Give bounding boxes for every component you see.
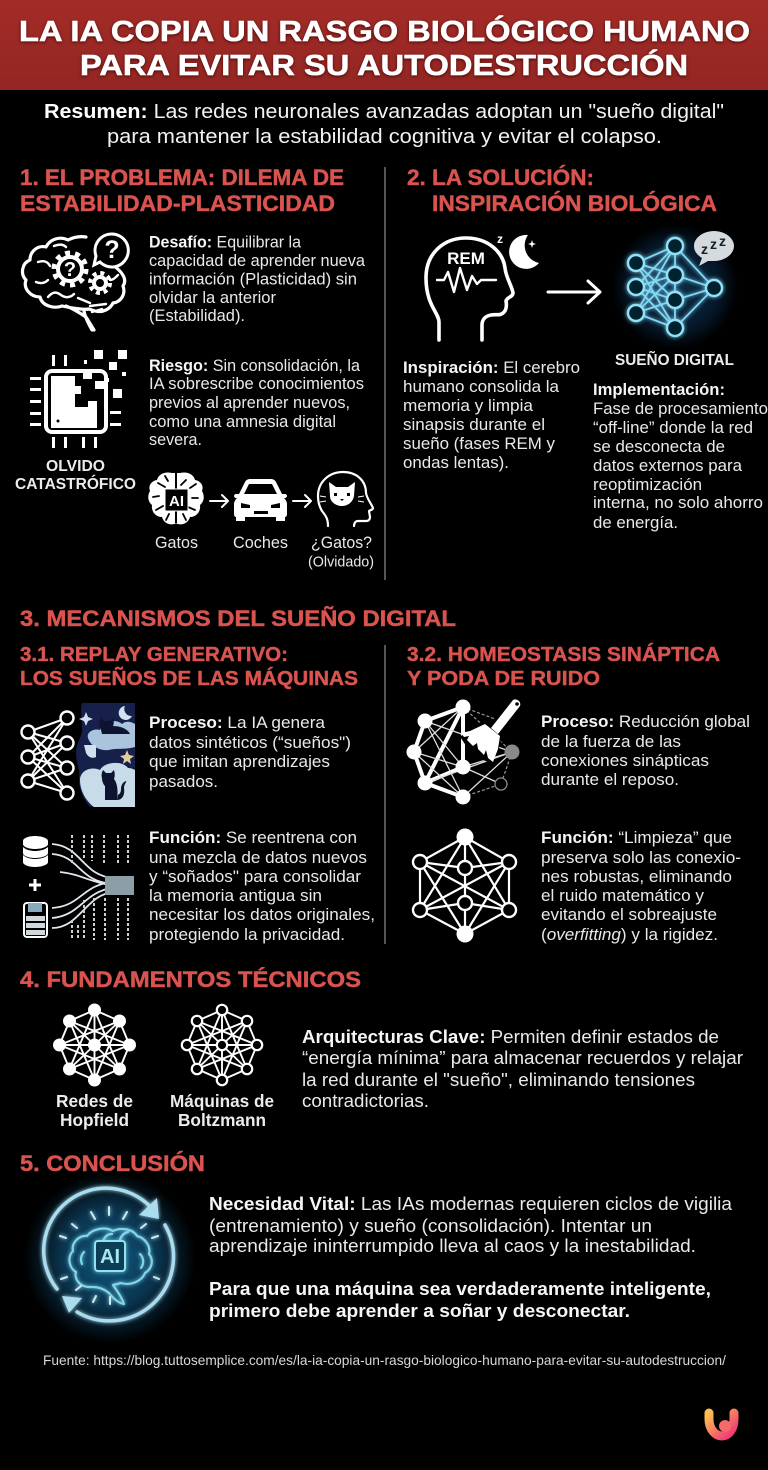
title banner [0, 0, 768, 90]
heading: section 5: 5. CONCLUSIÓN [20, 1151, 205, 1176]
text: funcion: Función: “Limpieza” que [541, 828, 732, 847]
icon: network with brush [406, 699, 520, 804]
icon: glowing neural network: z [710, 236, 717, 252]
text: inspiracion: Inspiración: El cerebro [403, 358, 580, 377]
icon: boltzmann machine [182, 1005, 262, 1085]
icon: chip dissolving [30, 350, 127, 448]
text: necesidad vital: (entrenamiento) y sueño (consolidación). Intentar un [209, 1215, 652, 1236]
text: proceso: durante el reposo. [541, 770, 679, 789]
text: funcion [149, 828, 375, 944]
text: funcion: y “soñados" para consolidar [149, 867, 361, 886]
text: implementacion: datos externos para [593, 456, 743, 475]
icon: human head REM: z [497, 232, 503, 246]
text: arquitecturas clave: la red durante el "sueño", eliminando tensiones [302, 1069, 695, 1090]
text: funcion: evitando el sobreajuste [541, 905, 717, 924]
title banner: LA IA COPIA UN RASGO BIOLÓGICO HUMANO [19, 14, 750, 48]
label: gatos olvidado: ¿Gatos? [311, 533, 372, 552]
text: implementacion: reoptimización [593, 475, 702, 494]
text: proceso: Proceso: La IA genera [149, 713, 326, 732]
icon: human head REM: REM [447, 249, 485, 268]
icon: hopfield network [53, 1004, 136, 1086]
heading: section 1: ESTABILIDAD-PLASTICIDAD [20, 191, 335, 216]
label: olvido catastrofico: CATASTRÓFICO [15, 474, 136, 493]
heading: section 1: 1. EL PROBLEMA: DILEMA DE [20, 165, 344, 190]
icon: brain with gears and question: ? [104, 236, 120, 264]
text: funcion: nes robustas, eliminando [541, 867, 732, 886]
icon: clean network [413, 828, 516, 942]
title banner: PARA EVITAR SU AUTODESTRUCCIÓN [80, 48, 688, 82]
label: olvido catastrofico [15, 458, 136, 493]
label: olvido catastrofico: OLVIDO [46, 458, 105, 475]
label: maquinas de boltzmann: Boltzmann [178, 1110, 266, 1130]
text: implementacion [593, 380, 768, 532]
text: necesidad vital [209, 1193, 733, 1256]
text: proceso: que imitan aprendizajes [149, 752, 330, 771]
label: coches: Coches [233, 533, 288, 552]
text: proceso: de la fuerza de las [541, 732, 681, 751]
icon: glowing neural network: z [719, 233, 726, 249]
icon: glowing neural network [612, 224, 738, 349]
text: riesgo: Riesgo: Sin consolidación, la [149, 356, 361, 375]
icon: AI brain [148, 472, 204, 524]
icon: AI brain: AI [169, 493, 184, 510]
text: desafio: Desafío: Equilibrar la [149, 232, 302, 252]
text: desafio [149, 232, 366, 325]
summary: para mantener la estabilidad cognitiva y evitar el colapso. [107, 126, 662, 148]
text: riesgo [149, 356, 364, 449]
text: funcion: una mezcla de datos nuevos [149, 848, 367, 867]
label: gatos: Gatos [155, 533, 198, 552]
heading: section 2: INSPIRACIÓN BIOLÓGICA [432, 191, 717, 216]
text: implementacion: de energía. [593, 513, 678, 532]
text: inspiracion [403, 358, 580, 472]
heading: 3.2 [407, 643, 720, 690]
icon: glowing AI brain cycle [24, 1172, 196, 1344]
label: maquinas de boltzmann: Máquinas de [170, 1091, 274, 1111]
text: closing statement: primero debe aprender a soñar y desconectar. [209, 1300, 630, 1321]
text: arquitecturas clave: Arquitecturas Clave: Permiten definir estados de [302, 1026, 719, 1047]
heading: 3.1: LOS SUEÑOS DE LAS MÁQUINAS [20, 667, 358, 690]
label: gatos olvidado: (Olvidado) [308, 554, 374, 570]
heading: section 4: 4. FUNDAMENTOS TÉCNICOS [20, 967, 361, 992]
text: arquitecturas clave: “energía mínima” para almacenar recuerdos y relajar [302, 1047, 743, 1068]
text: funcion: Función: Se reentrena con [149, 828, 357, 847]
text: funcion: (overfitting) y la rigidez. [541, 925, 718, 944]
text: funcion: el ruido matemático y [541, 886, 704, 905]
text: funcion: necesitar los datos originales, [149, 905, 375, 924]
text: inspiracion: humano consolida la [403, 377, 560, 396]
text: riesgo: previos al aprender nuevos, [149, 393, 350, 412]
panel: fundamentos tecnicos [20, 967, 743, 1130]
icon: network and dream cats [22, 703, 135, 807]
text: implementacion: Implementación: [593, 380, 725, 399]
panel: homeostasis sinaptica [406, 643, 750, 944]
label: gatos olvidado [308, 533, 374, 570]
text: proceso: pasados. [149, 772, 218, 791]
icon: head with cat [318, 472, 373, 526]
text: funcion: protegiendo la privacidad. [149, 925, 345, 944]
icon: glowing AI brain cycle: AI [100, 1246, 120, 1268]
label: redes de hopfield [56, 1091, 133, 1130]
text: necesidad vital: Necesidad Vital: Las IAs modernas requieren ciclos de vigilia [209, 1193, 733, 1214]
icon: data streams merging [23, 835, 134, 940]
text: inspiracion: sinapsis durante el [403, 415, 545, 434]
text: riesgo: como una amnesia digital [149, 412, 336, 431]
text: proceso: Proceso: Reducción global [541, 712, 750, 731]
heading: section 3: 3. MECANISMOS DEL SUEÑO DIGITAL [20, 606, 456, 631]
text: implementacion: “off-line” donde la red [593, 418, 753, 437]
text: funcion [541, 828, 741, 944]
summary [44, 101, 724, 148]
text: inspiracion: ondas lentas). [403, 453, 509, 472]
icon: car [234, 479, 287, 521]
icon: brain with gears and question [23, 234, 128, 330]
text: proceso [541, 712, 750, 789]
text: implementacion: Fase de procesamiento [593, 399, 768, 418]
text: desafio: olvidar la anterior [149, 288, 276, 307]
text: arquitecturas clave: contradictorias. [302, 1090, 429, 1111]
text: funcion: la memoria antigua sin [149, 886, 322, 905]
label: redes de hopfield: Hopfield [60, 1110, 129, 1130]
heading: 3.1 [20, 644, 358, 690]
icon: logo [709, 1413, 734, 1436]
heading: 3.1: 3.1. REPLAY GENERATIVO: [20, 644, 288, 666]
text: desafio: capacidad de aprender nueva [149, 251, 366, 270]
text: necesidad vital: aprendizaje ininterrumpido lleva al caos y la inestabilidad. [209, 1235, 696, 1256]
text: inspiracion: sueño (fases REM y [403, 434, 555, 453]
arrow [210, 495, 228, 507]
text: inspiracion: memoria y limpia [403, 396, 534, 415]
heading: section 1 [20, 165, 344, 216]
label: sueno digital: SUEÑO DIGITAL [615, 349, 734, 369]
text: riesgo: IA sobrescribe conocimientos [149, 374, 364, 393]
label: redes de hopfield: Redes de [56, 1091, 133, 1111]
text: closing statement: Para que una máquina sea verdaderamente inteligente, [209, 1278, 711, 1299]
panel: la solucion [403, 165, 768, 532]
heading: section 2: 2. LA SOLUCIÓN: [407, 165, 594, 190]
text: desafio: (Estabilidad). [149, 306, 245, 325]
panel: replay generativo [20, 644, 375, 944]
icon: brain with gears and question: ? [64, 259, 76, 281]
text: implementacion: interna, no solo ahorro [593, 493, 763, 512]
icon: glowing neural network: z [701, 241, 708, 257]
text: arquitecturas clave [302, 1026, 743, 1111]
icon: human head REM [426, 232, 539, 340]
panel: conclusion [20, 1151, 733, 1344]
arrow [293, 495, 311, 507]
text: proceso: datos sintéticos (“sueños") [149, 733, 351, 752]
text: proceso [149, 713, 351, 791]
text: riesgo: severa. [149, 430, 202, 449]
arrow: head to network [548, 281, 600, 303]
label: maquinas de boltzmann [170, 1091, 274, 1130]
heading: 3.2: 3.2. HOMEOSTASIS SINÁPTICA [407, 643, 720, 666]
summary: Resumen: Las redes neuronales avanzadas adoptan un "sueño digital" [44, 101, 724, 123]
heading: section 2 [407, 165, 717, 216]
text: closing statement [209, 1278, 711, 1321]
text: desafio: información (Plasticidad) sin [149, 270, 357, 288]
heading: 3.2: Y PODA DE RUIDO [407, 668, 600, 690]
text: funcion: preserva solo las conexio- [541, 848, 741, 867]
source line: Fuente: https://blog.tuttosemplice.com/es/la-ia-copia-un-rasgo-biologico-humano-para-evitar-su-autodestruccion/ [43, 1352, 726, 1368]
diagram: gatos coches olvidado [148, 472, 374, 570]
text: proceso: conexiones sinápticas [541, 751, 709, 770]
text: implementacion: se desconecta de [593, 437, 725, 456]
panel: el problema [15, 165, 374, 570]
